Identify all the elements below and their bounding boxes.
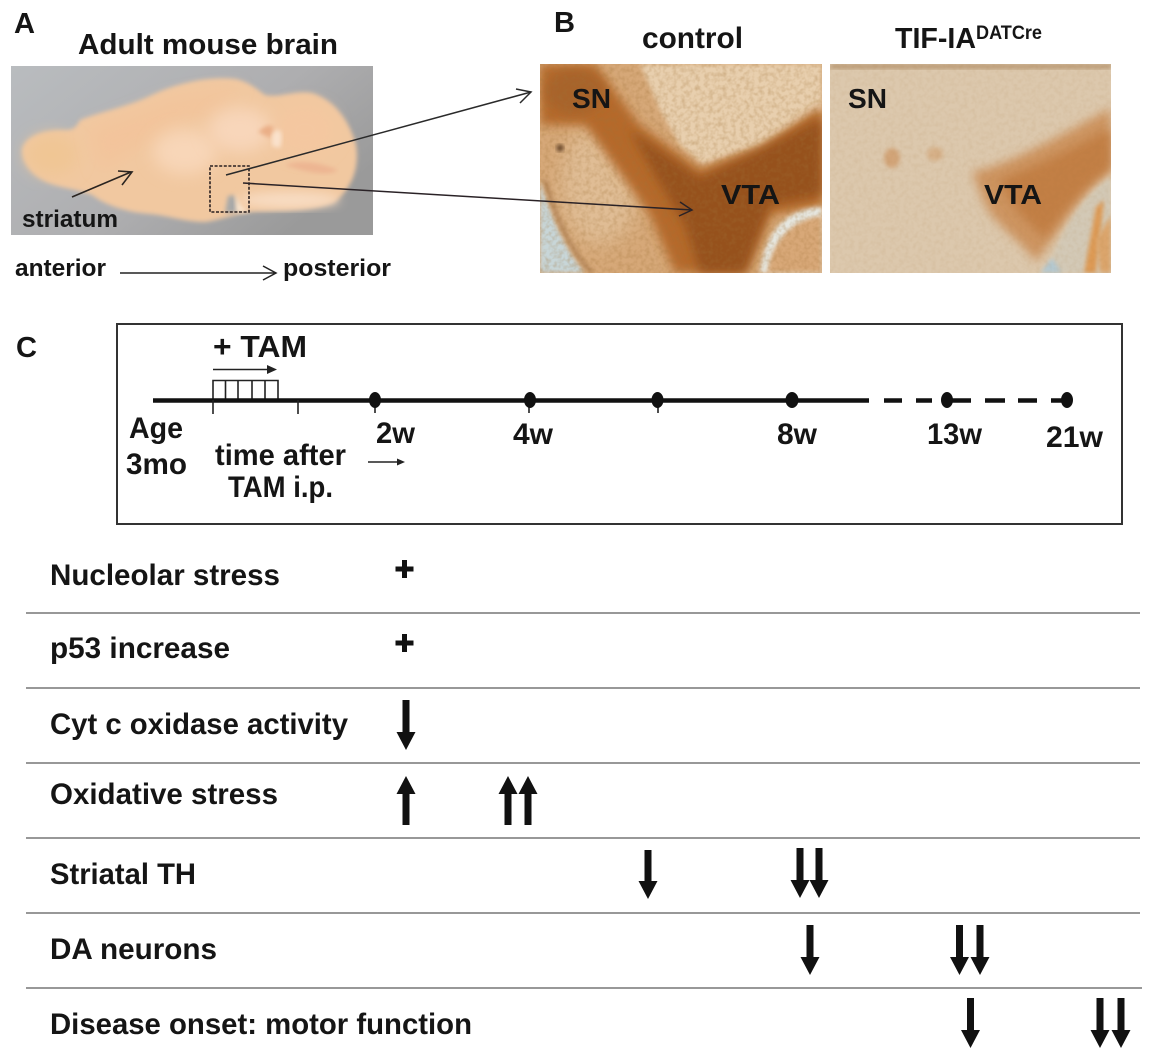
age label: Age <box>129 412 183 445</box>
brain photograph <box>11 66 373 235</box>
arrow: brain region to VTA <box>243 183 692 216</box>
TAM i.p. label: TAM i.p. <box>228 471 333 504</box>
axis ticks <box>213 400 658 414</box>
DATCre superscript: DATCre <box>976 23 1042 44</box>
row: cyt c oxidase activity: Cyt c oxidase activity <box>50 708 348 741</box>
row: DA neurons <box>50 925 990 975</box>
panel letter B: B <box>554 7 575 39</box>
panel A: adult mouse brain <box>11 8 391 282</box>
time direction arrow <box>368 458 405 466</box>
TAM duration arrow <box>213 365 277 374</box>
panel letter A: A <box>14 8 35 40</box>
solid time axis <box>153 398 851 403</box>
event table <box>26 559 1142 1048</box>
time after label: time after <box>215 439 346 472</box>
week labels <box>376 417 1104 454</box>
week labels: 2w <box>376 417 416 450</box>
control micrograph <box>540 64 822 273</box>
row: oxidative stress: Oxidative stress <box>50 778 278 811</box>
SN label, control: SN <box>572 83 611 114</box>
row: p53 increase: p53 increase <box>50 632 230 665</box>
row: p53 increase <box>50 632 414 665</box>
anterior to posterior arrow <box>120 266 276 280</box>
row: oxidative stress <box>50 776 538 825</box>
week labels: 8w <box>777 418 818 451</box>
arrow: brain region to SN <box>226 89 531 175</box>
dashed time axis <box>851 398 1067 403</box>
row: cyt c oxidase activity <box>50 700 416 750</box>
TIF-IA DATCre heading: TIF-IA <box>895 23 976 55</box>
row: disease onset: Disease onset: motor function <box>50 1008 472 1041</box>
panel letter C: C <box>16 332 37 364</box>
row: striatal TH: Striatal TH <box>50 858 196 891</box>
TIF-IA micrograph <box>830 64 1111 273</box>
row: disease onset <box>50 998 1130 1048</box>
row separators <box>26 613 1142 988</box>
anterior label: anterior <box>15 255 106 282</box>
plus TAM label: + TAM <box>213 329 307 364</box>
posterior label: posterior <box>283 255 391 282</box>
panel B: histology <box>540 7 1111 273</box>
week labels: 4w <box>513 418 554 451</box>
time point markers <box>369 392 1073 408</box>
panel C: timeline <box>16 324 1122 524</box>
week labels: 13w <box>927 418 983 451</box>
dashed selection box <box>210 166 249 212</box>
heading: adult mouse brain: Adult mouse brain <box>78 29 338 61</box>
arrow to striatum <box>72 171 132 197</box>
VTA label, TIF-IA: VTA <box>984 179 1042 210</box>
control heading: control <box>642 22 743 55</box>
row: nucleolar stress: Nucleolar stress <box>50 559 280 592</box>
row: nucleolar stress <box>50 559 414 592</box>
row: DA neurons: DA neurons <box>50 933 217 966</box>
striatum label: striatum <box>22 206 118 233</box>
timeline frame <box>117 324 1122 524</box>
week labels: 21w <box>1046 421 1104 454</box>
row: striatal TH <box>50 848 828 899</box>
TAM injection boxes <box>213 380 278 400</box>
SN label, TIF-IA: SN <box>848 83 887 114</box>
VTA label, control: VTA <box>721 179 780 210</box>
3mo label: 3mo <box>126 448 187 481</box>
